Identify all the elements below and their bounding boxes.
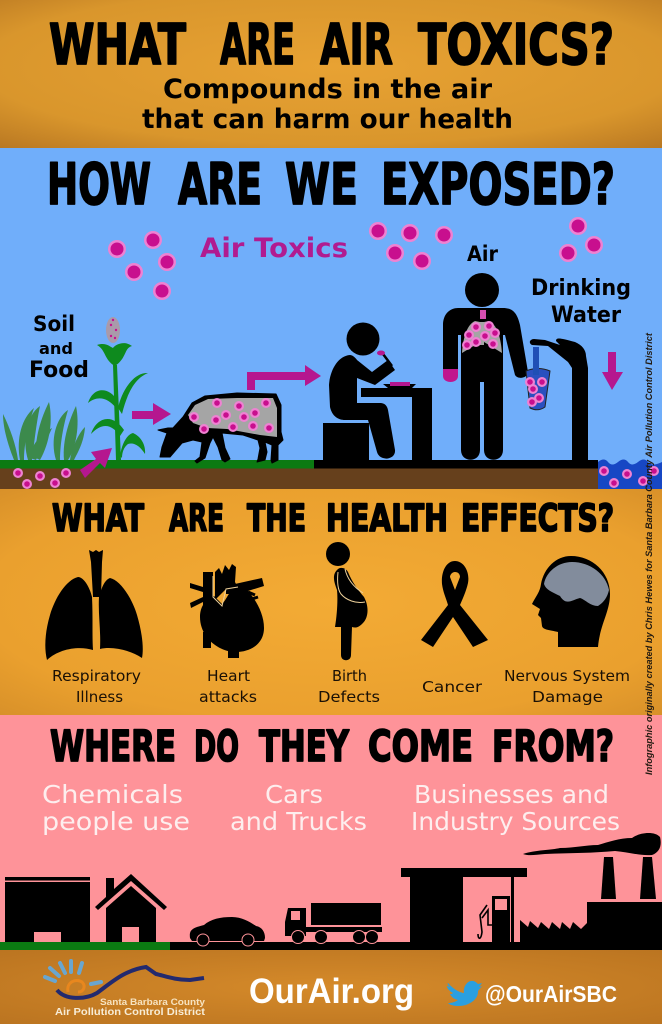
icon: seated person eating xyxy=(323,322,432,460)
panel: what are air toxics xyxy=(0,0,662,148)
title: WHAT xyxy=(49,13,186,78)
website: OurAir.org xyxy=(249,972,414,1011)
vertical credit: Infographic originally created by Chris Hewes for Santa Barbara County Air Pollution Control District xyxy=(644,332,655,775)
heading: health effects: HEALTH xyxy=(326,497,448,540)
icon: pregnant figure xyxy=(326,542,368,660)
heading: exposure: WE xyxy=(285,152,358,218)
subtitle: Compounds in the air xyxy=(163,74,493,105)
labels: source types: Chemicals xyxy=(42,780,183,809)
arrow: plant to cow xyxy=(132,403,171,425)
icon: gas station xyxy=(401,868,527,942)
icon: corn plant xyxy=(88,317,148,460)
icon: truck xyxy=(285,903,382,944)
heading: sources: FROM? xyxy=(492,722,614,772)
icon: car xyxy=(190,917,265,946)
arrow: cow to person xyxy=(247,365,321,390)
label: drinking water: Water xyxy=(551,303,621,328)
logo: text: Santa Barbara County xyxy=(100,997,205,1007)
heading: exposure: HOW xyxy=(47,152,151,218)
icon: head with brain xyxy=(532,556,610,647)
icon: factory with smoke xyxy=(520,833,662,942)
heading: health effects: EFFECTS? xyxy=(461,497,614,540)
ground: soil and grass xyxy=(0,460,598,489)
panel: health effects xyxy=(0,489,662,715)
twitter handle: @OurAirSBC xyxy=(485,981,617,1007)
labels: source types: and Trucks xyxy=(230,807,367,836)
icon: faucet and glass xyxy=(525,338,588,460)
heading: health effects: THE xyxy=(247,497,306,540)
logo: swoosh and mountains xyxy=(57,967,204,998)
icon: contaminated water xyxy=(598,460,662,489)
icon: lungs xyxy=(45,550,143,660)
ground strip xyxy=(0,942,662,950)
labels: health effects: Birth xyxy=(332,667,367,685)
icon: house xyxy=(95,874,167,942)
arrow: water down xyxy=(602,352,623,390)
labels: health effects: Nervous System xyxy=(504,667,630,685)
heading: sources: COME xyxy=(368,722,473,772)
labels: source types: people use xyxy=(42,807,190,836)
icon: twitter bird xyxy=(447,981,482,1006)
labels: health effects xyxy=(52,667,630,706)
logo: text: Air Pollution Control District xyxy=(55,1007,206,1018)
label: soil and food: and xyxy=(39,339,73,358)
label: air: Air xyxy=(467,242,499,266)
logo: text xyxy=(55,997,206,1018)
labels: source types: Businesses and xyxy=(414,780,609,809)
icon: standing person with lungs xyxy=(443,273,528,460)
label: soil and food xyxy=(29,312,89,383)
heading: health effects: WHAT xyxy=(52,497,145,540)
arrow: soil to plant xyxy=(80,448,112,478)
label: soil and food: Soil xyxy=(33,312,75,336)
panel: how are we exposed xyxy=(0,148,662,493)
labels: source types: Cars xyxy=(265,780,323,809)
logo: air pollution control district xyxy=(45,961,206,1018)
heading: sources: WHERE xyxy=(50,722,176,772)
labels: health effects: Cancer xyxy=(422,678,483,696)
heading: sources: THEY xyxy=(259,722,350,772)
heading: exposure: ARE xyxy=(178,152,262,218)
labels: health effects: attacks xyxy=(199,688,257,706)
panel: footer xyxy=(0,950,662,1024)
labels: health effects: Heart xyxy=(207,667,250,685)
title: AIR xyxy=(320,13,393,78)
title xyxy=(49,13,614,78)
icon: heart xyxy=(190,564,264,658)
subtitle: that can harm our health xyxy=(142,104,513,135)
subtitle xyxy=(142,74,513,135)
air toxic particles xyxy=(108,217,603,300)
heading: health effects: ARE xyxy=(169,497,224,540)
panel: where do they come from xyxy=(0,715,662,950)
label: drinking water xyxy=(531,276,631,328)
labels: source types xyxy=(42,780,620,836)
labels: health effects: Respiratory xyxy=(52,667,141,685)
labels: health effects: Illness xyxy=(76,688,123,706)
logo: sun rays xyxy=(45,961,101,984)
label: drinking water: Drinking xyxy=(531,276,631,301)
heading: health effects xyxy=(52,497,614,540)
icon: cancer ribbon xyxy=(421,561,488,647)
heading: sources: DO xyxy=(194,722,239,772)
label: soil and food: Food xyxy=(29,358,89,383)
icon: grass xyxy=(3,402,85,460)
icon: store building xyxy=(5,877,90,942)
title: ARE xyxy=(220,13,295,78)
heading: sources xyxy=(50,722,614,772)
label: air toxics: Air Toxics xyxy=(200,233,348,264)
icon: cow xyxy=(158,393,283,463)
heading: exposure xyxy=(47,152,615,218)
labels: source types: Industry Sources xyxy=(411,807,620,836)
labels: health effects: Damage xyxy=(532,688,603,706)
labels: health effects: Defects xyxy=(318,688,380,706)
lungs with particles xyxy=(462,310,502,353)
